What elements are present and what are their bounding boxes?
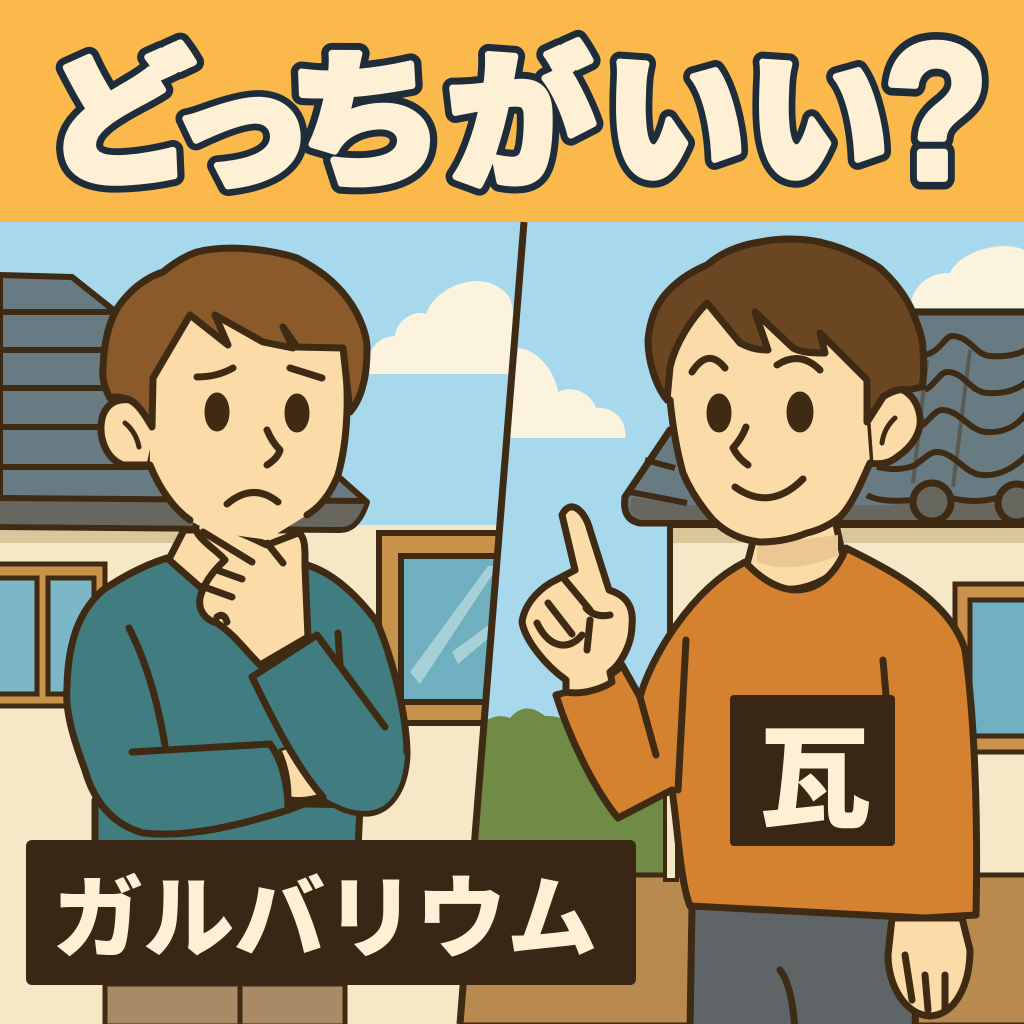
nose and mouth right xyxy=(733,427,803,498)
person right: pointing man xyxy=(522,239,977,1024)
eyes right xyxy=(710,397,728,429)
divider line xyxy=(460,222,524,1024)
eyes left xyxy=(208,396,226,428)
cloud left xyxy=(368,281,514,374)
header band xyxy=(0,0,1024,222)
sweater xyxy=(67,558,407,834)
cloud middle xyxy=(505,348,625,438)
ground xyxy=(460,875,1024,1024)
sweater lines xyxy=(129,628,340,810)
hand xyxy=(196,523,308,665)
neck shadow xyxy=(757,535,838,567)
nose and mouth left xyxy=(227,430,280,504)
cloud right xyxy=(910,246,1024,308)
kawara patch: 瓦 xyxy=(759,717,871,842)
sleeve front xyxy=(252,635,405,811)
window left on left scene xyxy=(0,564,105,706)
pants left xyxy=(105,984,345,1024)
ear right xyxy=(867,389,920,464)
tile roof right xyxy=(625,312,1024,523)
person left: worried man xyxy=(67,248,407,850)
roof left xyxy=(0,275,367,530)
neck right xyxy=(745,520,845,589)
hair right xyxy=(648,239,924,422)
title: が xyxy=(445,37,598,209)
wall right xyxy=(670,525,1024,885)
wrist under arm xyxy=(280,746,320,799)
left scene: galvalume house xyxy=(0,222,530,1024)
window right xyxy=(955,584,1024,752)
head left xyxy=(150,300,347,540)
galvalume label: ガルバリウム xyxy=(52,870,598,970)
head right xyxy=(670,300,885,542)
sweater right xyxy=(556,548,977,918)
title: ち xyxy=(285,36,447,209)
eyebrows left xyxy=(197,368,322,378)
window right on left scene xyxy=(379,533,499,723)
eyebrows right xyxy=(692,358,820,372)
neck xyxy=(167,530,300,590)
wall left xyxy=(0,525,500,1024)
hand lower right xyxy=(888,918,970,1016)
pants right xyxy=(690,905,918,1024)
title: ど xyxy=(40,35,202,207)
ear left xyxy=(101,400,160,465)
title: い xyxy=(742,36,893,211)
galvalume label xyxy=(26,840,636,985)
right scene: tile house xyxy=(460,222,1024,1024)
torso and arms xyxy=(95,800,360,850)
sweater lines right xyxy=(640,640,886,790)
title: い xyxy=(599,36,750,211)
kawara patch xyxy=(730,695,895,846)
title xyxy=(40,4,988,219)
bush xyxy=(478,708,663,872)
title: っ xyxy=(163,45,318,212)
hand right xyxy=(522,507,632,693)
title: ? xyxy=(884,4,988,219)
hair left xyxy=(103,248,367,427)
